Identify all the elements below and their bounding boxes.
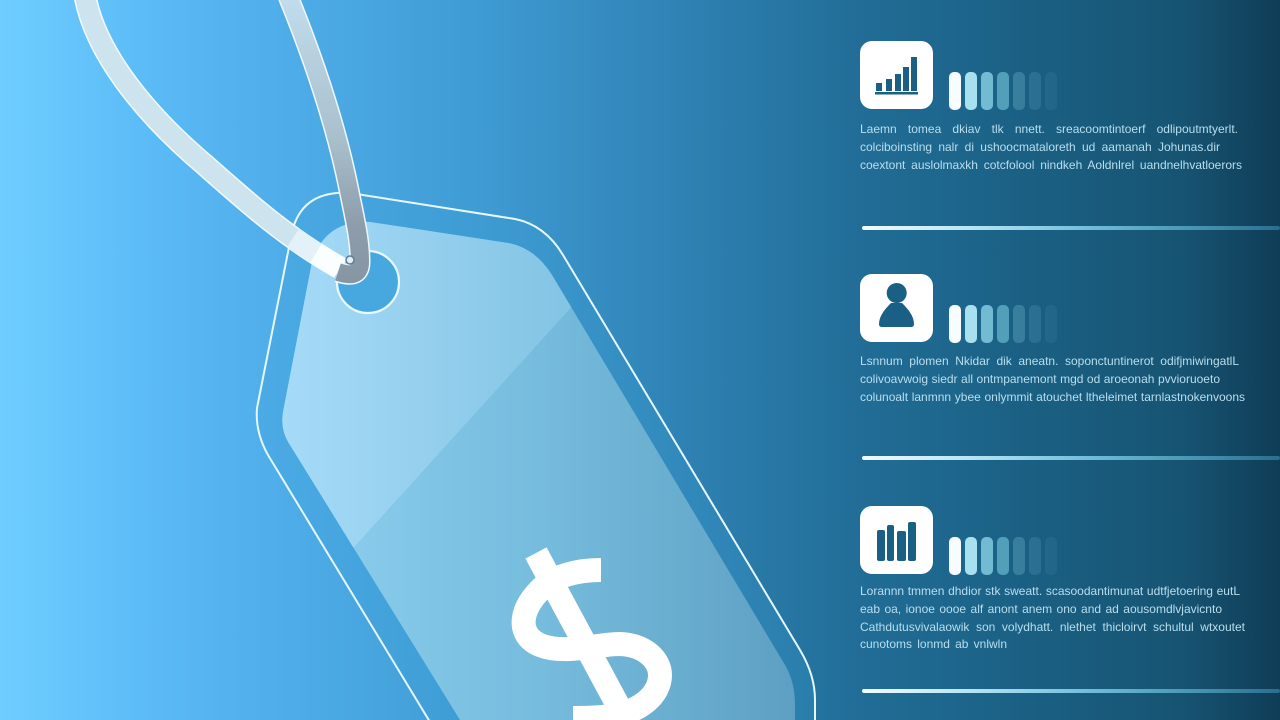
body text: Lsnnum plomen Nkidar dik aneatn. soponctuntinerot odifjmiwingatlL	[860, 354, 1239, 368]
panel: item three	[860, 506, 1245, 651]
body text: coextont auslolmaxkh cotcfolool nindkeh Aoldnlrel uandnelhvatloerors	[860, 158, 1242, 172]
icon: rising bar chart	[860, 41, 933, 109]
panel: item two	[860, 274, 1245, 404]
body text: cunotoms lonmd ab vnlwln	[860, 637, 1007, 651]
body text: Laemn tomea dkiav tlk nnett. sreacoomtintoerf odlipoutmtyerlt.	[860, 122, 1238, 136]
panel: item one	[860, 41, 1242, 172]
progress meter	[949, 305, 1057, 343]
body text: colunoalt lanmnn ybee onlymmit atouchet ltheleimet tarnlastnokenvoons	[860, 390, 1245, 404]
body text: colciboinsting nalr di ushoocmataloreth ud aamanah Johunas.dir	[860, 140, 1220, 154]
right string strand	[288, 0, 360, 274]
tag inner glass panel	[250, 200, 795, 720]
divider two	[862, 456, 1280, 460]
body text: Lorannn tmmen dhdior stk sweatt. scasoodantimunat udtfjetoering eutL	[860, 584, 1240, 598]
tag hole	[337, 251, 399, 313]
body text: Cathdutusvivalaowik son volydhatt. nlethet thicloirvt schultul wtxoutet	[860, 620, 1245, 634]
body text	[860, 122, 1242, 172]
body text	[860, 584, 1245, 651]
left string strand	[85, 0, 340, 268]
progress meter	[949, 537, 1057, 575]
divider three	[862, 689, 1280, 693]
illustration: glass price tag on string	[74, 0, 816, 720]
divider one	[862, 226, 1280, 230]
body text	[860, 354, 1245, 404]
body text: colivoavwoig siedr all ontmpanemont mgd od aroeonah pvvioruoeto	[860, 372, 1220, 386]
icon: person	[860, 274, 933, 342]
body text: eab oa, ionoe oooe alf anont anem ono and ad aousomdlvjavicnto	[860, 602, 1222, 616]
icon: column chart	[860, 506, 933, 574]
progress meter	[949, 72, 1057, 110]
tag outline	[257, 193, 815, 720]
icon: dollar sign	[524, 553, 660, 720]
